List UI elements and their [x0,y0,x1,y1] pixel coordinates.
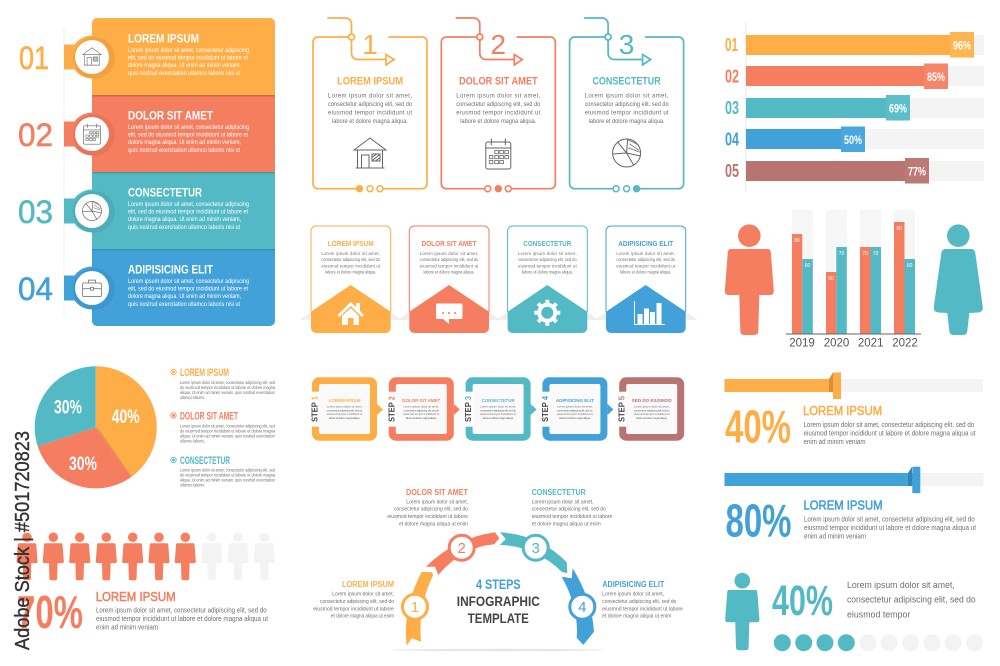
panel: vertical numbered list [18,18,275,326]
section 02: Lorem ipsum dolor sit amet, consectetur adipiscing [128,124,249,131]
section 04: elit, sed do eiusmod tempor incididunt ut labore et [128,286,248,292]
legend: consectetur: do eiusmod tempor incididunt ut labore et dolore magna [180,472,276,478]
legend: consectetur: CONSECTETUR [180,455,230,467]
label 1: LOREM IPSUM [342,580,394,589]
segment 2 [426,532,499,575]
section 02 [18,95,275,172]
segment 4 [562,568,594,645]
box 2: consectetur adipiscing elit, sed do [456,102,541,108]
step 1: LOREM IPSUM [328,398,360,404]
dot scale [774,634,983,651]
column chart: 50 [828,276,834,282]
panel: 80 percent slider: LOREM IPSUM [804,498,882,513]
text block: Lorem ipsum dolor sit amet, [847,580,955,590]
label 2: Lorem ipsum dolor sit amet, [406,499,468,505]
card 2: eiusmod tempor incididunt ut [420,263,479,268]
step 4: consectetur adipiscing elit, sed do [557,408,593,412]
node 1: 1 [411,599,419,616]
section 02: DOLOR SIT AMET [128,108,214,122]
box 1: Lorem ipsum dolor sit amet, [328,94,412,100]
panel: people 70 percent [16,533,275,638]
text block: enim ad minim veniam [96,624,158,631]
column chart: 2022 [892,338,918,350]
step 5: STEP 5 [618,395,627,422]
card 2 [398,226,500,333]
node 1 [402,594,428,619]
panel: 40 percent slider: enim ad minim veniam [804,439,866,446]
section 03: Lorem ipsum dolor sit amet, consectetur adipiscing [128,201,249,208]
card 4: labore et dolore magna aliqua. [620,270,671,274]
panel: 80 percent slider: 80% [726,495,792,547]
column chart: 90 [896,226,902,232]
legend: consectetur: aliqua. Ut enim ad minim veniam, quis nostrud exercitation [180,478,276,482]
step 5: SED DO EIUSMOD [632,398,672,404]
legend: dolor sit amet [171,410,276,444]
column chart: 70 [862,251,868,257]
box 3: labore et dolore magna aliqua. [589,119,665,125]
icon: person [725,573,759,650]
panel: cards with roof icons [300,226,697,333]
step 2: consectetur adipiscing elit, sed do [403,408,440,412]
label 2: DOLOR SIT AMET [406,488,468,497]
box 2: DOLOR SIT AMET [459,76,538,88]
icon: gear [534,300,560,326]
card 4: eiusmod tempor incididunt ut [616,263,676,268]
panel: four-step arc [313,488,683,651]
label 4 [602,580,683,620]
node 2: 2 [458,540,466,557]
section 01 [19,18,275,95]
step 3 [464,377,537,441]
step 5: eiusmod tempor incididunt ut [634,412,670,416]
legend: lorem ipsum: Lorem ipsum dolor sit amet, consectetur adipiscing elit, sed [180,380,276,385]
node 3: 3 [532,540,540,557]
label 3: Lorem ipsum dolor sit amet, [532,499,593,505]
text block: Lorem ipsum dolor sit amet, consectetur adipiscing elit, sed do [96,607,267,614]
box 2: Lorem ipsum dolor sit amet, [456,94,541,100]
section 01: LOREM IPSUM [128,32,199,46]
label 2: eiusmod tempor incididunt ut labore [387,514,468,520]
card 4 [595,226,697,333]
card 3: Lorem ipsum dolor sit amet, [518,251,577,256]
section 01: quis nostrud exercitation ullamco laboris nisi ut [128,70,240,77]
step 5 [618,377,684,441]
card 2: consectetur adipiscing elit, sed do [420,257,479,262]
section 03: dolore magna aliqua. Ut enim ad minim veniam, [128,216,241,223]
label 1: consectetur adipiscing elit, sed do [320,599,394,605]
section 03: elit, sed do eiusmod tempor incididunt ut labore et [128,208,248,216]
icon: home [338,302,364,325]
card 3: consectetur adipiscing elit, sed do [518,257,577,262]
section 02: 02 [18,117,53,153]
center title [457,576,540,626]
step 5: Lorem ipsum dolor sit amet, [634,404,670,408]
panel: step process [310,377,684,441]
column chart: 2020 [824,338,849,350]
center title: INFOGRAPHIC [457,593,540,609]
panel: 40 percent slider: Lorem ipsum dolor sit amet, consectetur adipiscing elit, sed do [804,422,974,429]
section 04: quis nostrud exercitation ullamco laboris nisi ut [128,301,240,308]
step 3: CONSECTETUR [482,398,515,404]
stock id stamp: Adobe Stock | #501720823 [11,431,34,650]
section 01: Lorem ipsum dolor sit amet, consectetur adipiscing [128,47,249,54]
label 4: eiusmod tempor incididunt ut labore [602,606,683,612]
step 1 [310,377,383,441]
node 4: 4 [578,599,586,616]
section 03 [18,172,275,249]
card 1: LOREM IPSUM [328,239,374,248]
card 1 [300,226,401,333]
card 3: eiusmod tempor incididunt ut [518,263,577,268]
step 1: STEP 1 [310,395,320,422]
bar 03: 69% [889,102,907,116]
card 3: CONSECTETUR [523,239,572,248]
box 1: labore et dolore magna aliqua. [332,119,408,125]
step 1: eiusmod tempor incididunt ut [327,412,363,416]
bar 01 [725,32,984,58]
node 3 [523,535,548,560]
column chart: 2019 [789,338,815,350]
label 1 [313,580,395,620]
heading: LOREM IPSUM [96,589,176,604]
label 4: et dolore magna aliqua ut enim [602,614,672,620]
card 3: labore et dolore magna aliqua. [522,270,573,274]
panel: outlined boxes with numbered arrows [313,18,684,192]
bar 04: 04 [725,130,739,150]
pie: 40% [112,407,140,428]
column chart: 70 [873,251,879,257]
section 04: 04 [18,271,53,307]
legend: lorem ipsum: do eiusmod tempor incididunt ut labore et dolore magna [180,385,276,390]
bar 05: 77% [908,164,926,178]
step 1: labore et dolore magna aliqua. [329,416,360,420]
legend: dolor sit amet: do eiusmod tempor incididunt ut labore et dolore magna [180,428,276,434]
label 1: eiusmod tempor incididunt ut labore [313,606,394,612]
section 03: CONSECTETUR [128,186,202,200]
legend: dolor sit amet: Lorem ipsum dolor sit amet, consectetur adipiscing elit, sed [180,424,276,428]
section 02: elit, sed do eiusmod tempor incididunt ut labore et [128,132,248,138]
section 01: elit, sed do eiusmod tempor incididunt ut labore et [128,54,248,62]
text block: eiusmod tempor incididunt ut labore et dolore magna aliqua ut [96,616,268,623]
step 2: STEP 2 [387,395,396,422]
pie: 30% [69,454,97,475]
box 2: 2 [491,29,506,60]
card 2: labore et dolore magna aliqua. [424,270,474,274]
box 1: eiusmod tempor incididunt ut [328,110,412,116]
label 4: Lorem ipsum dolor sit amet, [602,592,664,598]
card 1: Lorem ipsum dolor sit amet, [321,251,380,256]
bar 02 [725,64,984,89]
text block: eiusmod tempor [847,609,910,619]
label 3: et dolore magna aliqua ut enim [532,521,601,527]
legend: consectetur: ullamco laboris. [180,482,205,488]
section 03: 03 [18,194,53,230]
card 2: DOLOR SIT AMET [422,239,477,248]
panel: horizontal progress bars [725,22,984,192]
step 3: STEP 3 [464,395,473,422]
box 1 [313,18,427,192]
box 3: Lorem ipsum dolor sit amet, [585,94,669,100]
step 1: consectetur adipiscing elit, sed do [327,408,363,412]
step 4: ADIPISICING ELIT [556,398,594,404]
panel: gender column chart [725,210,983,350]
label 3: eiusmod tempor incididunt ut labore [532,514,612,520]
bar 03 [725,95,984,120]
ground shadow [392,649,604,651]
big percent: 70% [17,586,83,638]
panel: 40 percent slider [724,372,983,453]
panel: 80 percent slider: enim ad minim veniam [804,533,866,540]
step 4: STEP 4 [541,395,550,422]
icon: bar chart [634,301,665,324]
step 2: eiusmod tempor incididunt ut [403,412,439,416]
center title: TEMPLATE [468,610,529,626]
card 1: eiusmod tempor incididunt ut [321,263,381,268]
bar 05: 05 [725,161,739,181]
panel: 80 percent slider: eiusmod tempor incididunt ut labore et dolore magna aliqua ut [804,525,976,532]
step 4: labore et dolore magna aliqua. [559,416,591,420]
segment 1 [406,572,433,646]
label 4: consectetur adipiscing elit, sed do [602,599,676,605]
label 2 [387,488,469,527]
section 04: dolore magna aliqua. Ut enim ad minim veniam, [128,293,241,300]
percent: 40% [772,577,833,625]
box 2: eiusmod tempor incididunt ut [456,110,541,116]
step 3: consectetur adipiscing elit, sed do [480,408,516,412]
section 04: Lorem ipsum dolor sit amet, consectetur adipiscing [128,278,249,285]
people row [16,533,275,580]
box 3: consectetur adipiscing elit, sed do [585,102,669,108]
panel: 40 percent slider: LOREM IPSUM [803,403,882,418]
card 3 [496,226,598,333]
node 2 [449,535,474,560]
bar 01: 96% [953,38,971,52]
legend: lorem ipsum: aliqua. Ut enim ad minim veniam, quis nostrud exercitation [180,390,276,395]
icon: man [725,224,774,335]
box 2 [441,18,555,192]
label 3 [532,488,612,527]
card 1: consectetur adipiscing elit, sed do [321,257,381,262]
step 3: eiusmod tempor incididunt ut [480,412,516,416]
step 5: consectetur adipiscing elit, sed do [634,408,670,412]
segment 3 [500,532,567,573]
legend: lorem ipsum: ullamco laboris. [180,395,205,400]
divider shadow [64,28,65,318]
column chart: 70 [839,251,844,257]
box 3: CONSECTETUR [592,76,661,88]
panel: 40 percent slider: eiusmod tempor incididunt ut labore et dolore magna aliqua ut [804,431,976,438]
label 1: et dolore magna aliqua ut enim [331,614,395,620]
label 2: et dolore magna aliqua ut enim [399,521,469,527]
bar 04 [725,126,984,152]
column chart: 2021 [858,338,883,350]
bar 01: 01 [725,35,738,55]
legend: lorem ipsum: LOREM IPSUM [180,367,229,379]
legend: dolor sit amet: DOLOR SIT AMET [180,410,238,422]
box 1: LOREM IPSUM [337,76,403,88]
label 2: consectetur adipiscing elit, sed do [394,507,468,513]
card 4: Lorem ipsum dolor sit amet, [616,251,675,256]
section 02: quis nostrud exercitation ullamco laboris nisi ut [128,147,240,154]
card 4: ADIPISICING ELIT [618,239,674,248]
box 3: 3 [619,29,634,60]
bar 03: 03 [725,98,739,118]
section 01: dolore magna aliqua. Ut enim ad minim veniam, [128,62,241,69]
panel: person 40 percent [725,573,983,651]
step 3: Lorem ipsum dolor sit amet, [480,404,516,408]
pie: 30% [54,398,82,418]
step 2 [387,377,460,441]
step 4: eiusmod tempor incididunt ut [557,412,593,416]
node 4 [570,594,595,619]
box 1: consectetur adipiscing elit, sed do [328,102,413,108]
panel: 80 percent slider [724,467,984,547]
box 3 [570,18,684,192]
panel: 40 percent slider: 40% [725,401,791,453]
pie [35,366,157,488]
step 5: labore et dolore magna aliqua. [636,416,667,420]
step 2: labore et dolore magna aliqua. [406,416,437,420]
section 02: dolore magna aliqua. Ut enim ad minim veniam, [128,139,241,146]
section 01: 01 [19,40,49,76]
step 2: DOLOR SIT AMET [402,398,440,404]
card 2: Lorem ipsum dolor sit amet, [420,251,478,256]
icon: chat bubble [436,304,462,324]
bar 04: 50% [844,133,862,147]
section 04: ADIPISICING ELIT [128,262,214,276]
label 3: CONSECTETUR [532,488,586,497]
section 03: quis nostrud exercitation ullamco laboris nisi ut [128,224,240,231]
section 04 [18,249,275,326]
legend: consectetur: Lorem ipsum dolor sit amet, consectetur adipiscing elit, sed [180,468,276,472]
panel: 80 percent slider: Lorem ipsum dolor sit amet, consectetur adipiscing elit, sed do [804,516,975,523]
card 4: consectetur adipiscing elit, sed do [616,257,676,262]
bar 05 [725,158,984,184]
step 4 [541,377,613,441]
bar 02: 02 [725,66,739,86]
label 1: Lorem ipsum dolor sit amet, [332,592,394,598]
legend: dolor sit amet: aliqua. Ut enim ad minim veniam, quis nostrud exercitation [180,434,276,438]
label 4: ADIPISICING ELIT [602,580,664,589]
step 3: labore et dolore magna aliqua. [483,416,514,420]
step 1: Lorem ipsum dolor sit amet, [327,404,363,408]
text block: consectetur adipiscing elit, sed do [847,595,976,605]
center title: 4 STEPS [476,576,521,592]
box 2: labore et dolore magna aliqua. [460,119,537,125]
box 3: eiusmod tempor incididunt ut [585,110,669,116]
label 3: consectetur adipiscing elit, sed do [532,507,606,513]
column chart: 80 [794,238,800,244]
step 4: Lorem ipsum dolor sit amet, [557,404,593,408]
card 1: labore et dolore magna aliqua. [325,270,376,274]
legend: consectetur [171,455,276,488]
text block [96,607,268,631]
box 1: 1 [362,29,378,60]
legend: lorem ipsum [171,367,276,400]
panel: pie chart [35,366,276,488]
legend: dolor sit amet: ullamco laboris. [180,438,205,444]
icon: woman [934,224,983,335]
step 2: Lorem ipsum dolor sit amet, [403,404,439,408]
column chart: 60 [907,263,913,269]
column chart: 60 [805,263,810,269]
bar 02: 85% [927,70,945,84]
column chart [786,210,921,350]
text block [847,580,976,619]
